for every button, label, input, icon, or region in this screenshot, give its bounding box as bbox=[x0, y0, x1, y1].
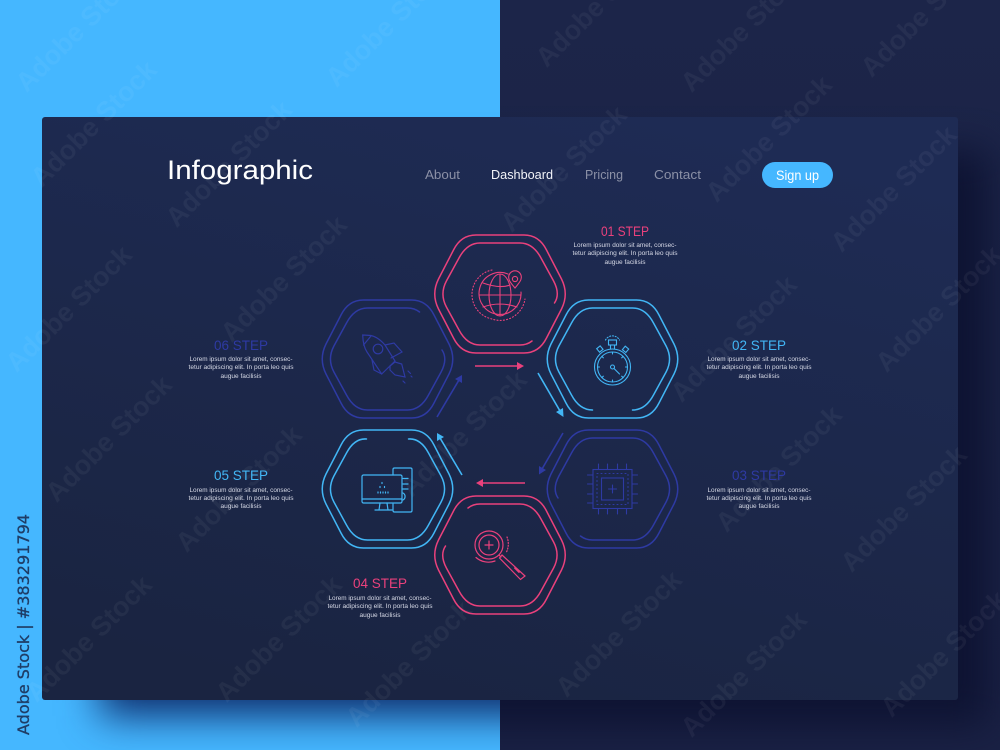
watermark overlay: Adobe Stock bbox=[210, 569, 348, 708]
hexagon 2: stopwatch bbox=[547, 300, 678, 418]
nav: contact: Contact bbox=[654, 167, 701, 182]
watermark overlay: Adobe Stock bbox=[215, 209, 353, 348]
text: step 6: Lorem ipsum dolor sit amet, consec- bbox=[190, 356, 292, 363]
nav: dashboard: Dashboard bbox=[491, 167, 553, 182]
watermark overlay: Adobe Stock bbox=[0, 239, 138, 378]
text: step 4: 04 STEP bbox=[353, 575, 407, 591]
nav: pricing: Pricing bbox=[585, 167, 623, 182]
arrow: step 6 to 1 bbox=[437, 375, 462, 417]
text: step 2: tetur adipiscing elit. In porta leo quis bbox=[706, 364, 812, 371]
watermark overlay: Adobe Stock bbox=[710, 399, 848, 538]
title: Infographic bbox=[167, 155, 313, 185]
arrow: step 3 to 4 bbox=[539, 433, 563, 474]
watermark overlay: Adobe Stock bbox=[665, 269, 803, 408]
stock id side text: Adobe Stock | #383291794 bbox=[14, 514, 33, 735]
text: step 3: 03 STEP bbox=[732, 467, 786, 483]
nav: about: About bbox=[425, 167, 460, 182]
watermark overlay: Adobe Stock bbox=[825, 119, 963, 258]
watermark overlay: Adobe Stock bbox=[160, 94, 298, 233]
text: step 1: augue facilisis bbox=[604, 259, 646, 266]
text: step 4: tetur adipiscing elit. In porta leo quis bbox=[328, 603, 432, 610]
text: step 5: tetur adipiscing elit. In porta leo quis bbox=[188, 495, 294, 502]
watermark overlay: Adobe Stock bbox=[550, 564, 688, 703]
text: step 1: 01 STEP bbox=[601, 223, 649, 239]
sign up button: Sign up bbox=[776, 168, 819, 183]
icon: globe with pin bbox=[472, 270, 525, 320]
hexagon 4: magnifier bbox=[435, 496, 565, 614]
watermark overlay: Adobe Stock bbox=[40, 369, 178, 508]
watermark overlay: Adobe Stock bbox=[700, 69, 838, 208]
panel shadow on light blue bbox=[72, 700, 500, 746]
text: step 1: tetur adipiscing elit. In porta leo quis bbox=[572, 250, 678, 257]
watermark overlay: Adobe Stock bbox=[675, 604, 813, 743]
hexagon 6: rocket bbox=[322, 300, 453, 418]
text: step 3: Lorem ipsum dolor sit amet, consec- bbox=[708, 487, 810, 494]
text: step 4 bbox=[328, 575, 432, 619]
background: light blue half bbox=[0, 0, 500, 750]
arrow: step 4 to 5 bbox=[476, 479, 525, 487]
hexagon 3: chip bbox=[547, 430, 678, 548]
watermark overlay: Adobe Stock bbox=[25, 54, 163, 193]
sign up button bbox=[762, 162, 833, 188]
text: step 4: Lorem ipsum dolor sit amet, consec- bbox=[328, 595, 432, 602]
text: step 6: tetur adipiscing elit. In porta leo quis bbox=[188, 364, 294, 371]
watermark overlay: Adobe Stock bbox=[20, 569, 158, 708]
main dashboard panel bbox=[42, 117, 958, 700]
hexagon 5: computer bbox=[322, 430, 453, 548]
panel shadow on navy bbox=[500, 144, 994, 728]
hexagon 1: globe bbox=[435, 235, 565, 353]
text: step 2: Lorem ipsum dolor sit amet, consec- bbox=[708, 356, 810, 363]
background: dark navy half bbox=[500, 0, 1000, 750]
watermark overlay: Adobe Stock bbox=[170, 419, 308, 558]
text: step 3: augue facilisis bbox=[738, 503, 780, 510]
text: step 6 bbox=[188, 337, 294, 380]
icon: stopwatch bbox=[594, 336, 630, 385]
arrow: step 2 to 3 bbox=[538, 373, 564, 417]
text: step 5 bbox=[188, 467, 294, 510]
text: step 5: Lorem ipsum dolor sit amet, consec- bbox=[190, 487, 292, 494]
text: step 1: Lorem ipsum dolor sit amet, consec- bbox=[574, 242, 676, 249]
watermark overlay: Adobe Stock bbox=[495, 99, 633, 238]
watermark overlay: Adobe Stock bbox=[395, 364, 533, 503]
text: step 1 bbox=[572, 223, 678, 266]
arrow: step 5 to 6 bbox=[437, 433, 462, 475]
watermark overlay: Adobe Stock bbox=[835, 439, 973, 578]
watermark overlay: Adobe Stock bbox=[340, 594, 478, 733]
text: step 4: augue facilisis bbox=[360, 612, 400, 619]
navigation bbox=[425, 167, 701, 182]
text: step 5: 05 STEP bbox=[214, 467, 268, 483]
text: step 2 bbox=[706, 337, 812, 380]
text: step 5: augue facilisis bbox=[220, 503, 262, 510]
icon: rocket bbox=[363, 335, 412, 383]
text: step 3 bbox=[706, 467, 812, 510]
text: step 2: augue facilisis bbox=[738, 373, 780, 380]
text: step 6: 06 STEP bbox=[214, 337, 268, 353]
text: step 6: augue facilisis bbox=[220, 373, 262, 380]
icon: desktop computer bbox=[362, 468, 412, 512]
text: step 3: tetur adipiscing elit. In porta leo quis bbox=[706, 495, 812, 502]
text: step 2: 02 STEP bbox=[732, 337, 786, 353]
icon: magnifying glass bbox=[475, 531, 525, 580]
arrow: step 1 to 2 bbox=[475, 362, 524, 370]
icon: processor chip bbox=[588, 464, 638, 514]
